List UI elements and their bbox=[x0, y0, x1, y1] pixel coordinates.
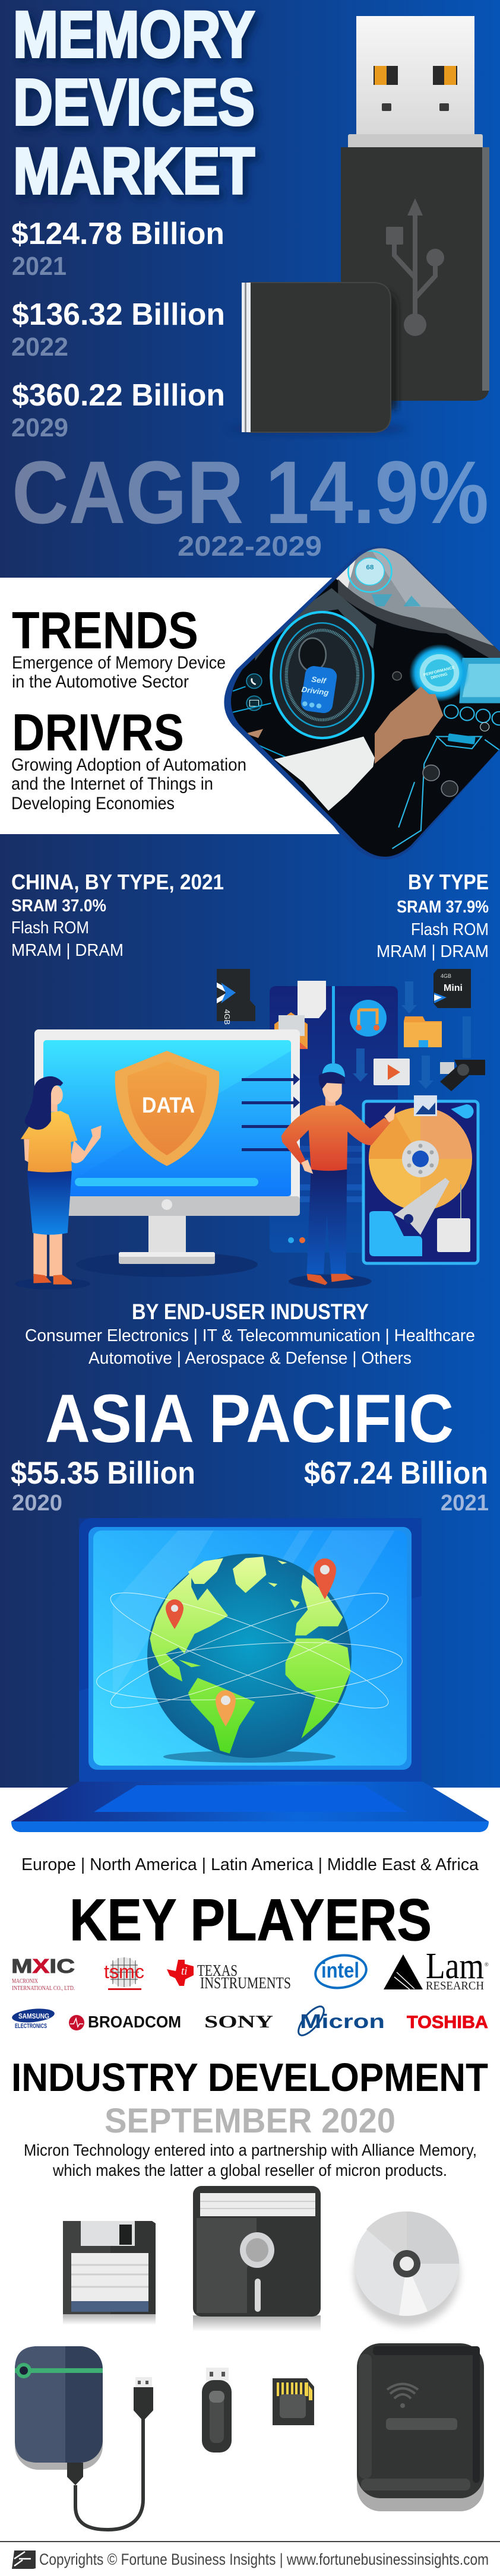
woman and man figures bbox=[15, 1033, 395, 1289]
icon: USB cap bbox=[229, 283, 407, 436]
diamond photo: car dashboard bbox=[220, 534, 500, 873]
icon: external hard drive with cable bbox=[15, 2346, 153, 2530]
logo: Texas Instruments: ti bbox=[181, 1965, 188, 1978]
text: drivers description: Developing Economies bbox=[11, 794, 175, 813]
date: SEPTEMBER 2020 bbox=[105, 2102, 395, 2140]
icon: mini SD card bbox=[433, 969, 471, 1008]
Asia Pacific heading and values: $55.35 Billion bbox=[11, 1456, 195, 1491]
icon: SD card bbox=[273, 2378, 314, 2425]
logo: Texas Instruments: INSTRUMENTS bbox=[200, 1974, 291, 1992]
icon: optical disc bbox=[354, 2211, 460, 2326]
icon: USB flash drive bbox=[341, 16, 489, 401]
logo: Sony: SONY bbox=[204, 2012, 273, 2032]
by type: China: CHINA, BY TYPE, 2021 bbox=[11, 870, 224, 894]
logo: MXIC: MACRONIX bbox=[12, 1978, 38, 1985]
by type: global: SRAM 37.9% bbox=[397, 898, 489, 917]
logo: Toshiba: TOSHIBA bbox=[407, 2013, 488, 2032]
logo: Fortune Business Insights bbox=[12, 2550, 36, 2569]
pin: North America bbox=[166, 1599, 183, 1629]
other regions: Europe | North America | Latin America | Middle East & Africa bbox=[21, 1855, 479, 1874]
footer bbox=[0, 2541, 500, 2569]
logo: Texas Instruments bbox=[167, 1960, 291, 1992]
icon: 3.5 inch floppy bbox=[63, 2221, 156, 2325]
text: trends description: in the Automotive Sector bbox=[12, 672, 189, 692]
icon: mini SD card: 4GB bbox=[441, 973, 451, 979]
icon: document bbox=[298, 981, 326, 1018]
globe bbox=[94, 1554, 404, 1758]
by end-user industry: Consumer Electronics | IT & Telecommunication | Healthcare bbox=[25, 1326, 475, 1345]
by end-user industry: Automotive | Aerospace & Defense | Others bbox=[88, 1349, 412, 1368]
by type: global: BY TYPE bbox=[408, 870, 489, 894]
icon: music bbox=[350, 1000, 387, 1037]
Asia Pacific heading and values: ASIA PACIFIC bbox=[45, 1381, 454, 1457]
hero title: DEVICES bbox=[13, 66, 255, 139]
icon: wireless drive bbox=[357, 2343, 484, 2511]
figure: man bbox=[281, 1033, 395, 1288]
by type: China: Flash ROM bbox=[11, 918, 89, 937]
market size figures: 2029 bbox=[11, 413, 68, 442]
icon: play tile bbox=[374, 1059, 410, 1085]
market size figures: $124.78 Billion bbox=[11, 217, 224, 251]
logo: MXIC bbox=[11, 1955, 75, 1992]
panel: trends and drivers bbox=[0, 578, 340, 834]
heading: drivers: DRIVRS bbox=[12, 703, 184, 762]
pin: South America bbox=[216, 1690, 236, 1726]
by end-user industry bbox=[25, 1300, 475, 1368]
logo: Micron: Micron bbox=[300, 2010, 385, 2032]
logo: Samsung bbox=[11, 2007, 55, 2030]
icon: folder bbox=[404, 1016, 442, 1047]
logo: Micron bbox=[295, 2003, 385, 2039]
diamond photo: car dashboard: DRIVING bbox=[431, 672, 448, 680]
heading: trends: TRENDS bbox=[12, 601, 198, 660]
hero title: MEMORY bbox=[13, 0, 255, 71]
logo: Intel: intel bbox=[321, 1958, 359, 1982]
logo: TSMC: tsmc bbox=[104, 1961, 144, 1982]
development text: which makes the latter a global reseller of micron products. bbox=[52, 2161, 447, 2179]
shield with DATA: DATA bbox=[142, 1093, 195, 1117]
market size figures: 2022 bbox=[11, 332, 68, 362]
hard disk drive bbox=[363, 1095, 478, 1263]
development text bbox=[24, 2141, 477, 2179]
by type: China: SRAM 37.0% bbox=[11, 896, 106, 915]
logo: Lam Research bbox=[384, 1946, 489, 1992]
Asia Pacific heading and values: 2020 bbox=[12, 1491, 62, 1516]
monitor bbox=[34, 1029, 300, 1277]
shield with DATA bbox=[115, 1051, 219, 1166]
logo: Samsung: SAMSUNG bbox=[18, 2012, 49, 2020]
logo: Lam Research: ® bbox=[485, 1962, 489, 1967]
text: trends description bbox=[12, 653, 226, 692]
faint arrows bbox=[353, 981, 471, 1089]
by type: China bbox=[11, 870, 224, 960]
diamond photo: car dashboard: Driving bbox=[301, 685, 330, 697]
logo: MXIC: MXIC bbox=[11, 1955, 75, 1977]
icon: mini SD card: Mini bbox=[444, 983, 463, 993]
logo: Lam Research: Lam bbox=[426, 1946, 484, 1986]
diamond photo: car dashboard: Self bbox=[311, 675, 327, 686]
CAGR: 2022-2029 bbox=[178, 530, 322, 562]
icon: swivel USB bbox=[440, 1060, 485, 1091]
text: drivers description bbox=[11, 755, 246, 813]
logo: TSMC bbox=[104, 1957, 144, 1990]
Asia Pacific heading and values bbox=[11, 1381, 489, 1516]
Asia Pacific heading and values: $67.24 Billion bbox=[304, 1456, 488, 1491]
text: drivers description: and the Internet of Things in bbox=[11, 774, 213, 794]
by type: global bbox=[376, 870, 489, 961]
heading: key players: KEY PLAYERS bbox=[69, 1887, 432, 1953]
Asia Pacific heading and values: 2021 bbox=[441, 1491, 489, 1516]
market size figures: $136.32 Billion bbox=[12, 297, 225, 332]
by end-user industry: BY END-USER INDUSTRY bbox=[132, 1300, 369, 1324]
logo: Texas Instruments: TEXAS bbox=[197, 1962, 238, 1979]
by type: global: MRAM | DRAM bbox=[376, 942, 489, 961]
icon: USB stick bbox=[202, 2368, 232, 2453]
logo: Samsung: ELECTRONICS bbox=[15, 2023, 47, 2030]
logo: Broadcom: BROADCOM bbox=[88, 2013, 181, 2031]
logo: Lam Research: RESEARCH bbox=[426, 1979, 484, 1992]
diamond photo: car dashboard: 68 bbox=[366, 564, 374, 571]
market size figures: $360.22 Billion bbox=[12, 378, 225, 413]
hero title bbox=[13, 0, 255, 208]
diamond photo: car dashboard: PERFORMANCE bbox=[423, 666, 455, 677]
by type: global: Flash ROM bbox=[411, 920, 489, 939]
icon: envelope bbox=[274, 1012, 308, 1049]
market size figures bbox=[11, 217, 225, 442]
laptop with globe bbox=[11, 1518, 489, 1832]
icon: micro SD card bbox=[217, 969, 255, 1025]
pin: Europe bbox=[314, 1558, 336, 1599]
by type: China: MRAM | DRAM bbox=[11, 941, 124, 960]
illustration: data storage bbox=[0, 969, 500, 2569]
logo: MXIC: INTERNATIONAL CO., LTD. bbox=[12, 1985, 75, 1992]
blue background bbox=[0, 0, 500, 1788]
icon: 5.25 inch floppy bbox=[193, 2186, 321, 2331]
text: drivers description: Growing Adoption of Automation bbox=[11, 755, 246, 775]
icon: micro SD card: 4GB bbox=[223, 1009, 232, 1025]
figure: woman bbox=[15, 1076, 102, 1289]
market size figures: 2021 bbox=[12, 252, 67, 281]
text: trends description: Emergence of Memory Device bbox=[12, 653, 226, 673]
hero title: MARKET bbox=[13, 135, 255, 208]
logo: Intel bbox=[314, 1952, 368, 1991]
